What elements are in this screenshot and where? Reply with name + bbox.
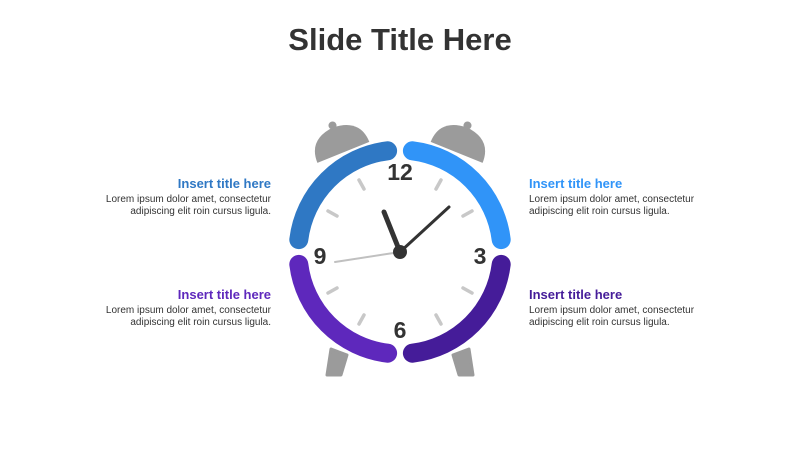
icon: feet	[327, 349, 473, 375]
text block: bottom right: Insert title here	[529, 287, 622, 302]
text block: bottom left: Lorem ipsum dolor amet, consectetur adipiscing elit roin cursus ligula.	[106, 305, 271, 328]
numbers: 12	[387, 159, 413, 185]
text block: bottom left: Insert title here	[178, 287, 271, 302]
text block: top left: Insert title here	[178, 176, 271, 191]
numbers: 6	[394, 317, 406, 343]
text block: top right	[529, 176, 694, 217]
text block: bottom left	[106, 287, 271, 328]
clock face	[300, 152, 500, 352]
numbers	[314, 159, 486, 343]
hands	[335, 207, 449, 262]
title: Slide Title Here	[288, 22, 512, 57]
text block: top right: Insert title here	[529, 176, 622, 191]
text block: top left: Lorem ipsum dolor amet, consectetur adipiscing elit roin cursus ligula.	[106, 194, 271, 217]
text block: top left	[106, 176, 271, 217]
numbers: 3	[474, 243, 486, 269]
numbers: 9	[314, 243, 326, 269]
text block: bottom right: Lorem ipsum dolor amet, consectetur adipiscing elit roin cursus ligula.	[529, 305, 694, 328]
icon: bells	[305, 111, 495, 163]
ring arcs	[299, 151, 501, 353]
ticks	[328, 180, 472, 324]
text block: top right: Lorem ipsum dolor amet, consectetur adipiscing elit roin cursus ligula.	[529, 194, 694, 217]
text block: bottom right	[529, 287, 694, 328]
